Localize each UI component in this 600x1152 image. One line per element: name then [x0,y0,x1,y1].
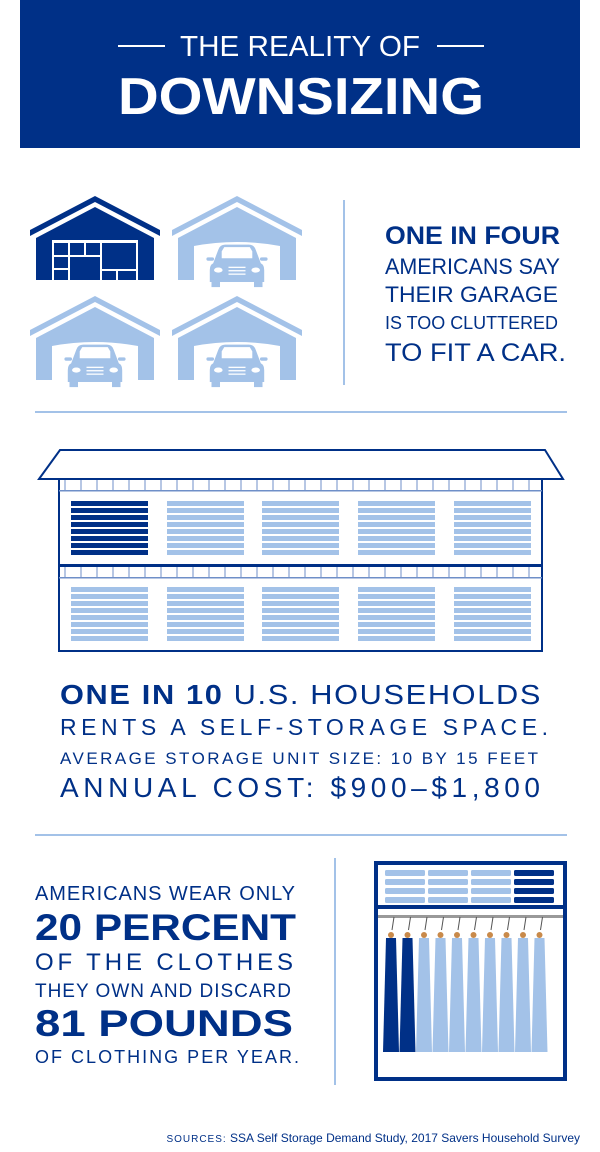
garage stat text: IS TOO CLUTTERED [385,313,558,333]
garage icons [30,196,302,387]
title: downsizing: DOWNSIZING [118,68,484,126]
storage building illustration [39,450,563,651]
closet illustration [376,863,565,1079]
garage stat text: ONE IN FOUR [385,222,560,250]
storage stat text: AVERAGE STORAGE UNIT SIZE: 10 BY 15 FEET [60,749,538,768]
clothing stat text: OF THE CLOTHES [35,949,293,976]
clothing stat text: 81 POUNDS [35,1003,293,1044]
sources: SOURCES: SSA Self Storage Demand Study, 2017 Savers Household Survey [166,1131,580,1145]
storage stat text: RENTS A SELF-STORAGE SPACE. [60,714,548,740]
clothing stat text: 20 PERCENT [35,907,296,948]
icon: garage with car 2 [30,296,160,387]
clothing stat text: THEY OWN AND DISCARD [35,981,291,1002]
garage stat text: AMERICANS SAY [385,254,560,279]
highlighted storage unit [71,501,148,555]
storage stat text: ONE IN 10 U.S. HOUSEHOLDS [60,679,542,710]
storage stat text [60,679,548,803]
subtitle: the reality of: THE REALITY OF [180,31,420,63]
clothing stat text: AMERICANS WEAR ONLY [35,883,295,905]
icon: garage with car 1 [172,196,302,287]
clothing stat text: OF CLOTHING PER YEAR. [35,1047,299,1067]
icon: cluttered garage [30,196,160,280]
garage stat text: TO FIT A CAR. [385,339,566,367]
icon: garage with car 3 [172,296,302,387]
clothing stat text [35,883,299,1067]
storage stat text: ANNUAL COST: $900–$1,800 [60,772,540,803]
garage stat text [385,222,566,367]
garage stat text: THEIR GARAGE [385,282,558,307]
header banner [20,0,580,148]
